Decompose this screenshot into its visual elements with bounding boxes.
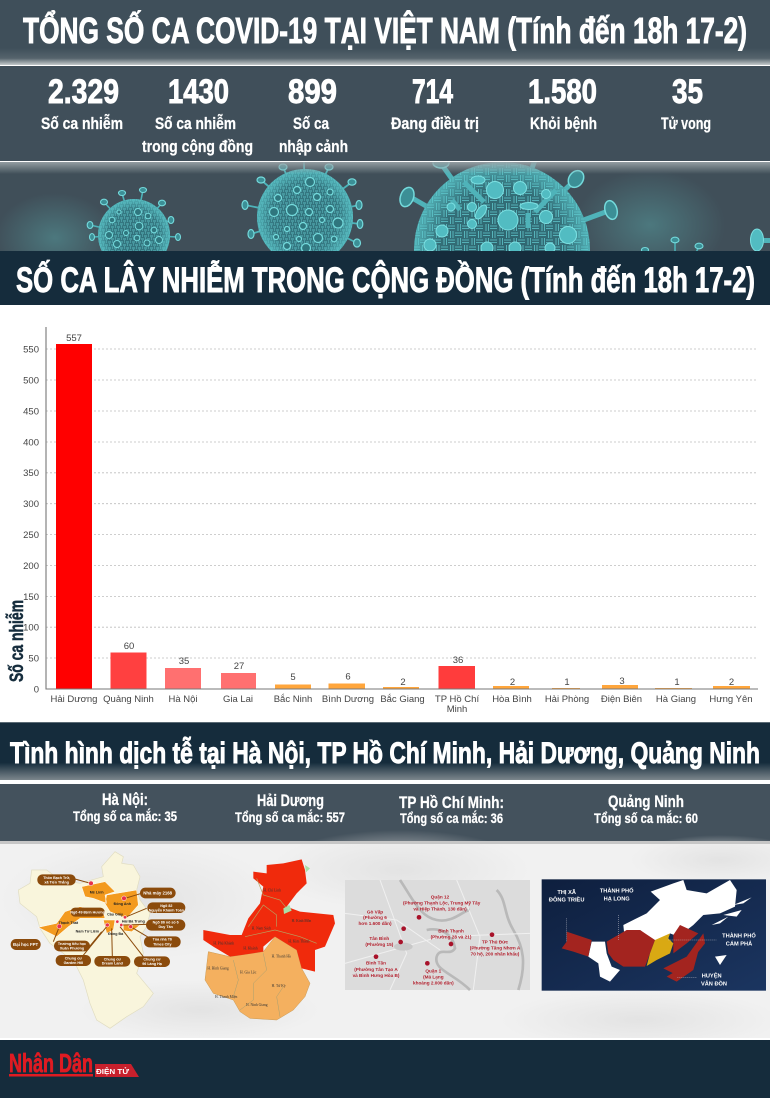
map: Quảng Ninh: THỊ XÃ (557, 889, 576, 896)
map: Hải Dương: H. Chí Linh (263, 889, 281, 893)
logo: Nhân Dân Điện Tử: ĐIỆN TỬ (96, 1067, 130, 1076)
stat: under treatment: Đang điều trị (391, 114, 479, 133)
category labels: Bình Dương (322, 694, 374, 705)
value labels: 2 (729, 677, 734, 688)
icon: medium virus (241, 162, 364, 251)
stat: recovered: Khỏi bệnh (530, 114, 597, 133)
map: TP Hồ Chí Minh: Quận 12 (431, 894, 450, 899)
map: Hà Nội: Garden Hill (64, 961, 83, 965)
area: Quảng Ninh: Quảng Ninh (608, 792, 684, 811)
category labels: Điện Biên (601, 694, 642, 705)
category labels: Hải Dương (51, 694, 97, 705)
y axis labels: 400 (23, 438, 39, 448)
map: Hà Nội: Đông Anh (114, 902, 131, 906)
stat: total infected: Số ca nhiễm (41, 114, 123, 133)
map: TP Hồ Chí Minh: (Mả Lạng (423, 974, 444, 979)
stat: community infected: trong cộng đồng (142, 137, 253, 156)
virus illustration band (0, 162, 770, 251)
map: Hải Dương (203, 859, 335, 1020)
value labels: 3 (619, 676, 625, 687)
map: Quảng Ninh: HẠ LONG (604, 897, 630, 903)
map: Hà Nội: Ngõ 82 (160, 904, 172, 908)
y axis labels: 450 (23, 406, 39, 418)
value labels (66, 333, 734, 688)
stat: community infected: Số ca nhiễm (155, 114, 236, 133)
map: TP Hồ Chí Minh: (Phường Tăng Nhơn A (470, 945, 521, 950)
map: Hà Nội: Thạch Thất (59, 921, 79, 925)
category labels: Hà Giang (656, 694, 696, 705)
stat: recovered (528, 73, 597, 133)
map: Hà Nội: Nhà máy 2168 (143, 891, 173, 896)
y axis labels: 50 (28, 654, 39, 664)
stat: recovered: 1.580 (528, 73, 597, 111)
category labels: Quảng Ninh (103, 694, 154, 705)
stat: imported cases: 899 (288, 73, 337, 111)
map: Hà Nội: Nguyễn Khánh Toàn (149, 908, 184, 912)
map: TP Hồ Chí Minh: Tân Bình (369, 936, 389, 941)
map: Hải Dương: H. Phú Khánh (213, 942, 234, 946)
map: TP Hồ Chí Minh: và Bình Hưng Hòa B) (353, 973, 400, 978)
area: TP Hồ Chí Minh: TP Hồ Chí Minh: (399, 793, 504, 812)
map: Hải Dương: H. Nam Sách (252, 926, 271, 930)
map: Hà Nội: Chung cư (104, 957, 121, 961)
bars (56, 344, 750, 689)
y axis labels: 550 (23, 344, 39, 356)
category labels: Hải Phòng (545, 694, 589, 705)
footer (0, 1038, 770, 1098)
map: Hà Nội: Ngõ 49 Định Hương (70, 911, 105, 915)
value labels: 35 (179, 656, 189, 667)
map: TP Hồ Chí Minh: hơn 1.600 dân) (358, 921, 392, 926)
stat: deaths: Tử vong (661, 114, 711, 133)
map: TP Hồ Chí Minh: Bình Thạnh (438, 929, 464, 934)
map: TP Hồ Chí Minh: khoảng 2.000 dân) (413, 980, 454, 985)
band highlight (0, 162, 770, 173)
map: TP Hồ Chí Minh: 70 hộ, 200 nhân khẩu) (471, 950, 520, 956)
area: Quảng Ninh (594, 792, 698, 826)
map: TP Hồ Chí Minh: TP Thủ Đức (482, 939, 509, 944)
map: Quảng Ninh: THÀNH PHỐ (722, 933, 756, 940)
map: Quảng Ninh: ĐÔNG TRIỀU (549, 896, 584, 904)
category labels: Hưng Yên (709, 694, 753, 705)
y axis labels: 300 (23, 499, 39, 510)
icon: large virus (399, 162, 618, 251)
value labels: 1 (564, 677, 570, 688)
panel: area totals (0, 784, 770, 841)
value labels: 60 (124, 641, 134, 652)
map: TP Hồ Chí Minh: (Phường 15) (365, 942, 394, 947)
map: TP Hồ Chí Minh: (Phường 28 và 21) (431, 935, 472, 940)
value labels: 27 (234, 661, 244, 672)
banner: epidemiological situation title (0, 722, 770, 780)
stat: imported cases: Số ca (293, 114, 329, 133)
stat: under treatment: 714 (412, 73, 453, 111)
area: Hải Dương: Tổng số ca mắc: 557 (235, 808, 345, 825)
map: Hà Nội: Thôn Bạch Trữ, (43, 876, 70, 880)
value labels: 36 (453, 655, 463, 666)
area: Hà Nội: Hà Nội: (102, 790, 148, 809)
value labels: 6 (345, 672, 351, 682)
stat: under treatment (391, 73, 479, 133)
value labels: 1 (674, 677, 680, 688)
map: Hà Nội: Cầu Giấy (107, 912, 124, 916)
map: Hà Nội: Duy Tân (158, 925, 173, 929)
area: Hải Dương: Hải Dương (257, 791, 324, 810)
area: Hà Nội: Tổng số ca mắc: 35 (73, 807, 177, 824)
logo: Nhân Dân Điện Tử: Nhân Dân (9, 1048, 93, 1078)
category labels: Gia Lai (223, 694, 253, 705)
map: Hải Dương: H. Gia Lộc (240, 970, 257, 974)
stat: total infected: 2.329 (48, 73, 119, 111)
map: TP Hồ Chí Minh: (Phường Thạnh Lộc, Trung Mỹ Tây (403, 900, 481, 905)
map: Hà Nội: Trường tiểu học (58, 942, 86, 946)
panel: maps background (0, 830, 770, 1050)
area: TP Hồ Chí Minh: Tổng số ca mắc: 36 (400, 809, 503, 826)
bar chart: community cases by province (0, 306, 770, 722)
y axis labels: 200 (23, 561, 39, 572)
map: Hà Nội: Chung cư (143, 958, 161, 962)
map: Quảng Ninh (542, 879, 766, 991)
value labels: 2 (400, 677, 406, 688)
map: Hải Dương: H. Ninh Giang (246, 1003, 268, 1007)
y axis labels: 150 (23, 592, 39, 603)
category labels: Hà Nội (168, 694, 198, 705)
map: TP Hồ Chí Minh: (Phường 6 (363, 915, 387, 920)
category labels (51, 694, 753, 715)
value labels: 2 (510, 677, 515, 688)
map: Quảng Ninh: THÀNH PHỐ (600, 888, 634, 895)
y axis title: Số ca nhiễm (6, 600, 28, 682)
map: Hải Dương: H. Khánh (243, 947, 258, 951)
stat: deaths (661, 73, 711, 133)
category labels: Bắc Giang (380, 694, 425, 705)
map: TP Hồ Chí Minh: Gò Vấp (367, 908, 383, 914)
value labels: 557 (66, 333, 82, 344)
y axis labels (23, 344, 39, 696)
icon: small virus (86, 187, 181, 251)
area: Quảng Ninh: Tổng số ca mắc: 60 (594, 809, 698, 826)
area: Hải Dương (235, 791, 345, 825)
map: Hà Nội: Mê Linh (90, 890, 104, 894)
map: TP Hồ Chí Minh: và Hiệp Thành, 130 dân) (413, 906, 467, 911)
map: Hải Dương: H. Tứ Kỳ (272, 984, 286, 988)
map: TP Hồ Chí Minh: Quận 1 (425, 968, 442, 973)
map: Hà Nội: 96 Láng Hạ (142, 962, 163, 966)
stat: total infected (41, 73, 123, 133)
y axis labels: 250 (23, 530, 39, 541)
map: Hải Dương: H. Thanh Miện (215, 995, 238, 999)
panel: national statistics (0, 66, 770, 161)
map: Hà Nội: Chung cư (65, 956, 82, 960)
map: Hà Nội: Dream Land (102, 962, 123, 966)
map: Hà Nội: Ngõ 86 nô số 6 (153, 921, 179, 925)
stat: imported cases: nhập cảnh (279, 137, 348, 156)
map: Hà Nội: Đại học FPT (13, 942, 39, 947)
map: Hải Dương: H. Bình Giang (207, 966, 229, 970)
icon: partial virus at right (641, 228, 770, 251)
value labels: 5 (290, 672, 296, 683)
map: Hải Dương: H. Kim Thành (288, 940, 310, 944)
y axis labels: 0 (34, 684, 39, 696)
map: Hà Nội: Hai Bà Trưng (122, 919, 145, 923)
map: Quảng Ninh: HUYỆN (702, 971, 722, 979)
map: Hải Dương: H. Kinh Môn (292, 919, 311, 923)
stat: community infected: 1430 (168, 73, 229, 111)
map: TP Hồ Chí Minh (345, 880, 530, 990)
y axis labels: 500 (23, 376, 39, 386)
stat: imported cases (279, 73, 348, 156)
y axis labels: 350 (23, 468, 39, 479)
map: Hà Nội: xã Tiến Thắng (44, 879, 69, 884)
area: Hà Nội (73, 790, 177, 824)
map: TP Hồ Chí Minh: Bình Tân (366, 961, 386, 966)
map: Hà Nội: Times City (153, 942, 173, 946)
category labels: TP Hồ Chí (435, 694, 479, 705)
header: national total title (0, 0, 770, 65)
map: Hà Nội: Đống Đa (108, 932, 124, 936)
map: Quảng Ninh: CẨM PHẢ (726, 940, 752, 947)
map: Quảng Ninh: VÂN ĐỒN (701, 980, 727, 987)
map: Hải Dương: H. Thanh Hà (272, 954, 291, 958)
stat: deaths: 35 (672, 73, 703, 111)
map: Hà Nội (11, 852, 185, 1028)
area: TP Hồ Chí Minh (399, 793, 504, 826)
category labels: Minh (447, 704, 467, 715)
stat: community infected (142, 73, 253, 156)
category labels: Bắc Ninh (274, 694, 312, 705)
map: Hà Nội: Xuân Phương (60, 946, 84, 950)
category labels: Hòa Bình (492, 694, 532, 705)
map: Hà Nội: Nam Từ Liêm (76, 929, 100, 933)
map: Hà Nội: Tòa nhà T6 (153, 938, 172, 942)
map: TP Hồ Chí Minh: (Phường Tân Tạo A (354, 967, 398, 972)
y axis labels: 100 (23, 622, 39, 634)
